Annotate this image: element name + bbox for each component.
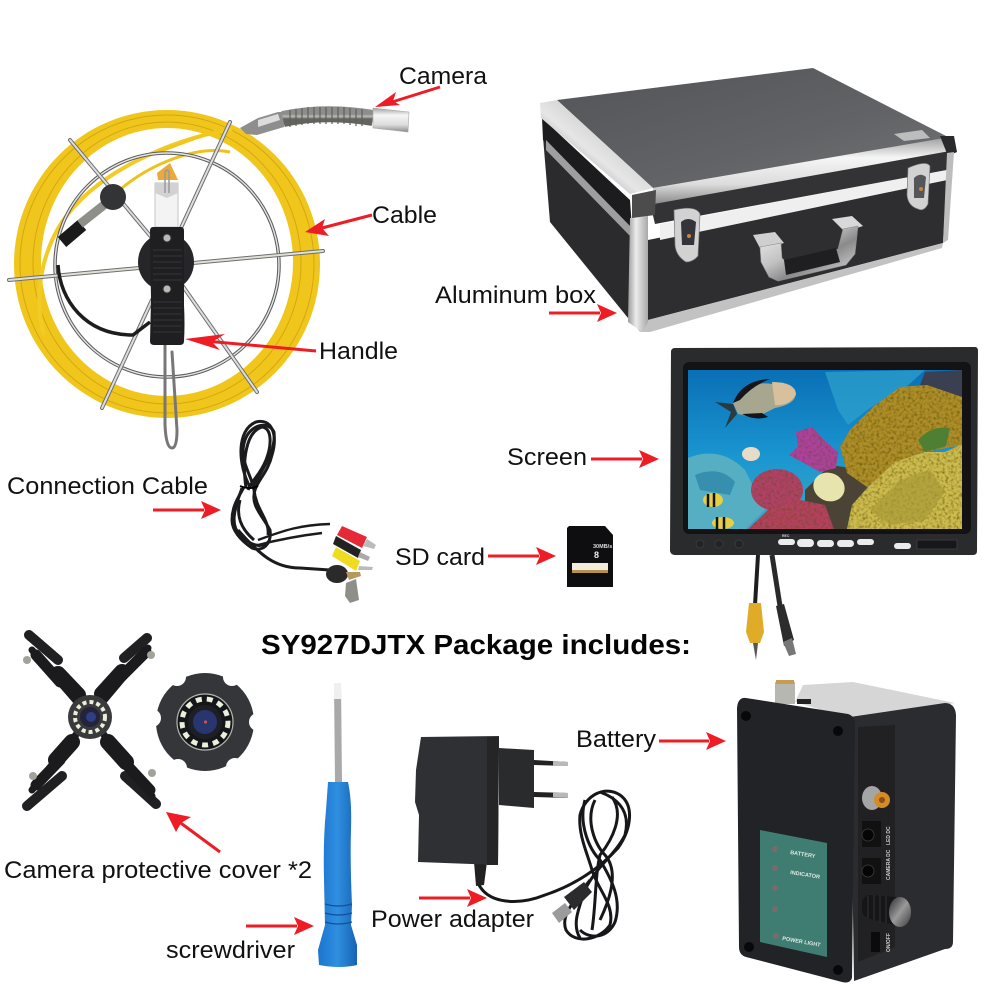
left latch [674,208,700,262]
monitor IR window [917,540,957,549]
label: Aluminum box: Aluminum box [435,282,596,309]
right latch [907,163,930,210]
bolts [23,651,156,780]
side labels: ON/OFF [886,933,892,952]
cross hub with LEDs [68,695,112,739]
right corner cap [940,136,957,156]
black lead wire [58,265,150,335]
cross arms [32,648,152,796]
connector and knob [62,184,126,242]
arrow: aluminum box [549,304,617,322]
arrow: protective cover [166,812,220,852]
pale yellow coral [847,444,962,529]
arrow: battery [659,732,726,750]
gear shaped cover [143,668,267,777]
video socket [862,786,890,810]
handle [150,227,184,345]
lid label [894,130,930,141]
side rail [542,118,632,228]
label: screwdriver: screwdriver [166,937,295,964]
rocks mid [805,465,868,529]
light water area [825,370,925,425]
arrow: camera [375,87,440,107]
green panel: POWER LIGHT [782,936,822,949]
arrow: screwdriver [246,917,314,935]
screwdriver handle [318,782,357,967]
corner cap top [632,190,656,218]
side labels [886,826,892,952]
adapter pins [534,760,568,798]
battery side [850,703,956,981]
camera probe [240,107,409,135]
label: Handle: Handle [319,338,398,365]
aluminum case [540,68,957,332]
monitor button labels: REC [782,534,790,538]
front face [648,180,947,320]
card body [567,526,613,587]
side panel [858,725,895,962]
title: SY927DJTX Package includes: [261,629,691,660]
steel ring frame [9,122,323,448]
card label strip [572,563,608,573]
adapter plug base [499,748,534,808]
left lid rail [540,100,653,194]
label: Camera: Camera [399,63,487,90]
top clip [155,163,178,227]
side labels: CAMERA DC [886,849,892,880]
lid top [557,68,950,188]
screw holes [741,711,843,975]
side hinge strip [546,140,630,236]
small pale fish [742,447,760,461]
camera protective cover with arms [23,635,267,806]
adapter body edge [487,737,499,865]
arrow: power adapter [419,889,487,907]
screwdriver [318,683,357,967]
monitor cables [746,555,796,660]
gold strip [572,570,608,573]
right edge [943,152,954,243]
latch band [660,170,947,240]
green panel: INDICATOR [790,870,820,881]
arrow: handle [185,334,316,351]
capacity text: 8 [594,550,599,560]
volume knob [862,895,911,927]
label: Camera protective cover *2: Camera protective cover *2 [4,857,312,884]
battery front [737,698,855,982]
pink coral [751,469,803,511]
green panel [760,830,827,957]
yellow plug [332,547,373,571]
label: Screen: Screen [507,444,587,471]
DC sockets [862,821,881,884]
DC plug [552,882,592,923]
battery unit [737,680,956,982]
dark coral top [920,370,962,397]
label: SD card: SD card [395,544,485,571]
underwater picture [688,370,962,529]
label: Connection Cable: Connection Cable [7,473,208,500]
battery top [795,682,955,720]
monitor buttons [778,539,911,549]
connector on top [775,680,811,704]
sea floor [688,454,765,529]
lid front strip [650,150,947,224]
side labels: LED DC [886,826,892,845]
coiled cable [232,421,330,570]
magenta coral [789,427,838,472]
inner bezel [683,362,971,534]
arrow: screen [591,450,659,468]
label: Battery: Battery [576,726,657,753]
power switch [871,932,880,952]
screwdriver blade tip [334,683,341,699]
arrow: cable [305,215,372,236]
strain relief [474,862,487,886]
yellow coil [14,110,320,418]
green coral patch [918,428,950,452]
front silver rail [653,138,950,204]
gold coral [840,385,962,487]
striped fish [703,493,734,529]
adapter body [415,736,499,865]
label: Cable: Cable [372,202,437,229]
arrow: SD card [488,547,556,565]
yellow fish [813,472,845,502]
hub [138,233,194,291]
green panel: BATTERY [790,850,816,860]
bottom rail [628,243,943,332]
SD card [567,526,613,587]
monitor round holes [696,540,743,548]
black plug [333,536,370,561]
power adapter [415,736,630,939]
label: Power adapter: Power adapter [371,906,534,933]
case left side [543,137,648,320]
handle grooves [325,904,352,924]
silver corner post [628,216,648,332]
monitor bezel [670,347,978,555]
big fish [715,379,796,428]
adapter cord [478,791,630,939]
red plug [337,526,376,549]
outer wheel plates [27,635,156,806]
reel with yellow cable [9,107,409,448]
screwdriver shaft [334,683,342,782]
case handle [753,216,863,281]
arrow: connection cable [153,501,221,519]
monitor screen [670,347,978,660]
speed text: 30MB/s [593,544,612,550]
connection cable [232,421,376,603]
cable connector [326,565,361,603]
